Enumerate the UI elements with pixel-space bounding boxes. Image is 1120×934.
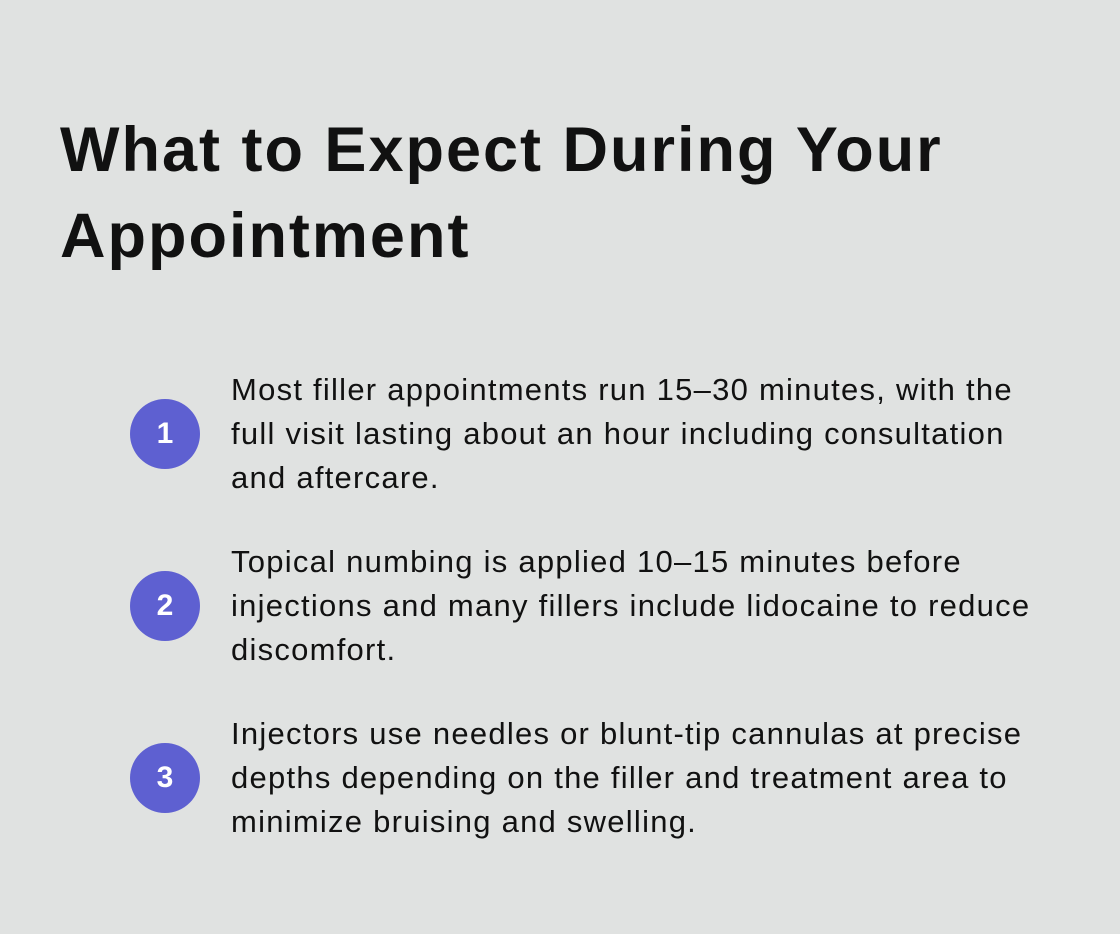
step 1 xyxy=(130,372,1013,495)
badge 1 xyxy=(130,399,200,469)
text 2: discomfort. xyxy=(231,632,396,667)
text 2: Topical numbing is applied 10–15 minutes before xyxy=(231,544,962,579)
badge 1: 1 xyxy=(157,417,173,450)
badge 3 xyxy=(130,743,200,813)
text 3: Injectors use needles or blunt-tip cannulas at precise xyxy=(231,716,1022,751)
text 2 xyxy=(231,544,1030,667)
badge 2 xyxy=(130,571,200,641)
badge 2: 2 xyxy=(157,589,173,622)
title: Appointment xyxy=(60,201,470,271)
step 2 xyxy=(130,544,1030,667)
text 1: full visit lasting about an hour including consultation xyxy=(231,416,1005,451)
badge 3: 3 xyxy=(157,761,173,794)
title: What to Expect During Your xyxy=(60,115,943,185)
text 1: Most filler appointments run 15–30 minutes, with the xyxy=(231,372,1013,407)
text 1: and aftercare. xyxy=(231,460,440,495)
text 3: minimize bruising and swelling. xyxy=(231,804,697,839)
text 1 xyxy=(231,372,1013,495)
text 3: depths depending on the filler and treatment area to xyxy=(231,760,1008,795)
title xyxy=(60,115,943,271)
text 3 xyxy=(231,716,1022,839)
text 2: injections and many fillers include lidocaine to reduce xyxy=(231,588,1030,623)
step 3 xyxy=(130,716,1022,839)
